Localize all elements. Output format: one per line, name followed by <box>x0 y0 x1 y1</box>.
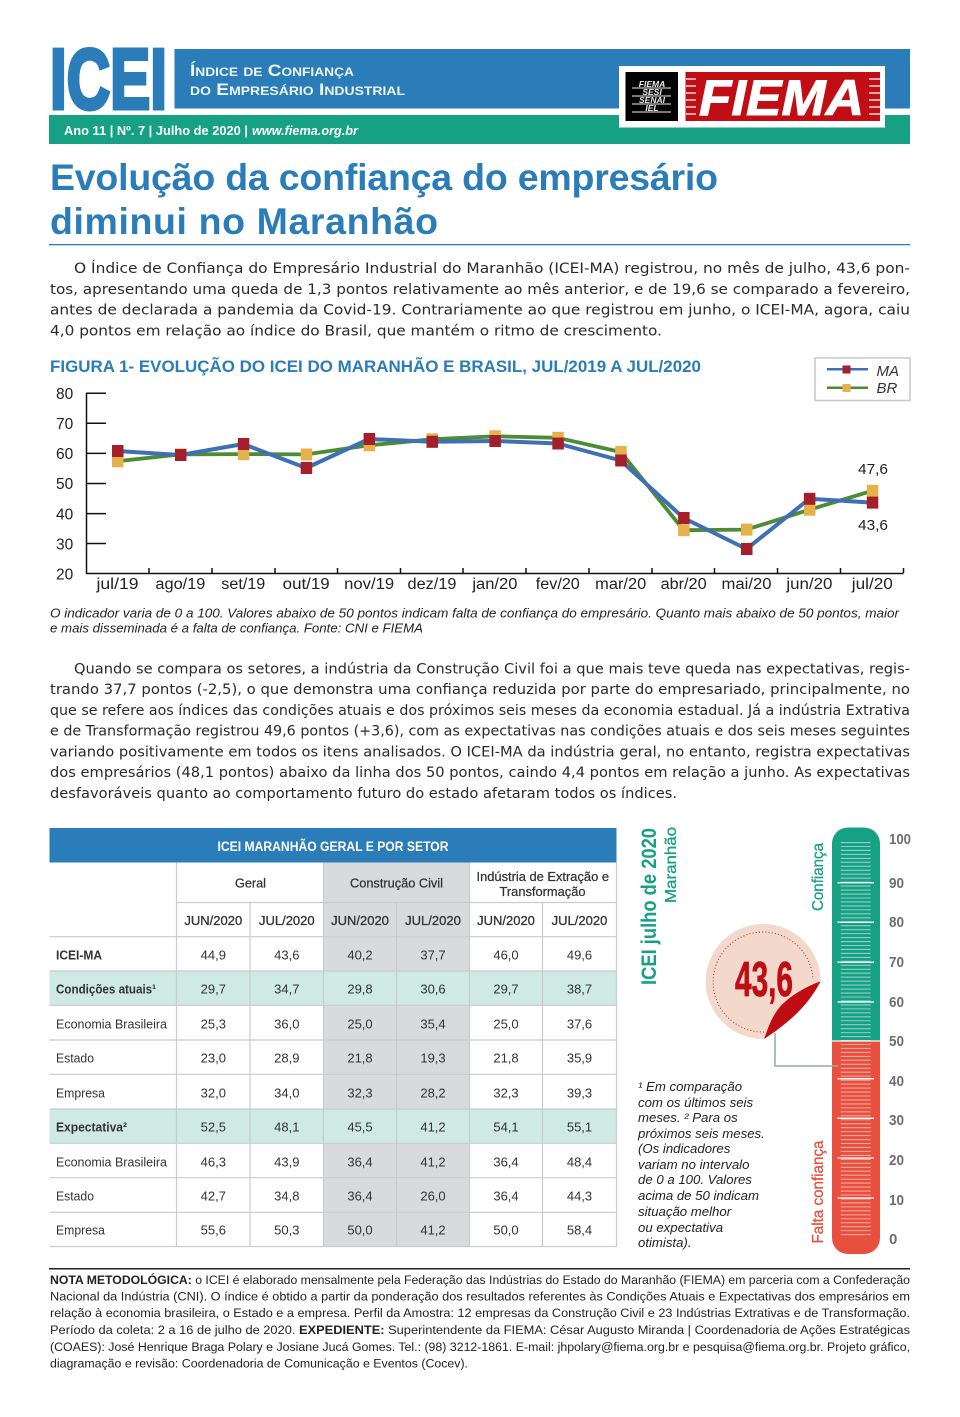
table values: 41,2 <box>420 1120 446 1134</box>
table values: 42,7 <box>201 1188 226 1204</box>
table values: 21,8 <box>493 1050 519 1066</box>
table values: 50,0 <box>347 1222 373 1238</box>
FIEMA logo <box>619 66 885 128</box>
table values: 34,0 <box>274 1086 299 1100</box>
main title: diminui no Maranhão <box>50 200 438 242</box>
table values: 35,4 <box>420 1016 446 1032</box>
footnote: variam no intervalo <box>638 1157 749 1172</box>
table values: 28,9 <box>274 1050 299 1066</box>
table values <box>201 948 592 1238</box>
line chart <box>56 386 904 593</box>
footnote: acima de 50 indicam <box>638 1188 759 1203</box>
row labels: Condições atuais¹ <box>56 982 156 996</box>
table values: 55,1 <box>567 1120 592 1134</box>
x axis labels: mai/20 <box>722 576 772 593</box>
month headers: JUN/2020 <box>477 913 535 928</box>
table values: 46,3 <box>201 1154 226 1170</box>
publication name <box>190 61 405 99</box>
row labels: Estado <box>56 1188 94 1204</box>
second paragraph: que se refere aos índices das condições atuais e dos próximos seis meses da economia estadual. Já a indústria Extrativa <box>50 702 910 719</box>
FIEMA logo: SENAI <box>639 95 666 105</box>
footnote: de 0 a 100. Valores <box>638 1172 752 1187</box>
table values: 46,0 <box>493 948 519 962</box>
month headers: JUN/2020 <box>331 913 389 928</box>
sticker disc <box>706 924 821 1039</box>
footnote: próximos seis meses. <box>637 1126 765 1141</box>
table header band <box>50 828 616 862</box>
row labels: Expectativa² <box>56 1120 128 1134</box>
footer rule <box>49 1268 910 1270</box>
table values: 29,7 <box>201 982 226 996</box>
y axis labels: 40 <box>56 506 74 524</box>
methodological note: Período da coleta: 2 a 16 de julho de 2020. EXPEDIENTE: Superintendente da FIEMA: César Augusto Miranda | Coordenadoria de Ações Estratégicas <box>50 1323 910 1337</box>
table values: 43,9 <box>274 1154 299 1170</box>
table values: 43,6 <box>274 948 299 962</box>
table values: 19,3 <box>420 1050 446 1066</box>
table values: 36,0 <box>274 1016 299 1032</box>
table values: 45,5 <box>347 1120 373 1134</box>
chart note: O indicador varia de 0 a 100. Valores abaixo de 50 pontos indicam falta de confiança do empresário. Quanto mais abaixo de 50 pontos, maior <box>50 606 900 620</box>
scale numbers: 90 <box>889 875 904 892</box>
edition line: Ano 11 | Nº. 7 | Julho de 2020 | <box>64 123 248 138</box>
table values: 36,4 <box>493 1188 519 1204</box>
scale numbers: 30 <box>889 1112 904 1129</box>
dotted ring <box>713 932 813 1032</box>
intro paragraph: 4,0 pontos em relação ao índice do Brasil, que mantém o ritmo de crescimento. <box>50 322 662 340</box>
connector line <box>775 1033 838 1066</box>
chart legend: MA <box>876 363 899 380</box>
x axis labels: mar/20 <box>595 576 647 593</box>
methodological note <box>50 1272 910 1370</box>
footnote: meses. ² Para os <box>638 1110 738 1125</box>
intro paragraph: tos, apresentando uma queda de 1,3 pontos relativamente ao mês anterior, e de 19,6 se comparado a fevereiro, <box>50 281 910 298</box>
y axis labels: 50 <box>56 476 74 493</box>
table values: 30,6 <box>420 982 446 996</box>
end value labels: 43,6 <box>858 517 888 534</box>
table values: 34,8 <box>274 1188 299 1204</box>
second paragraph: e de Transformação registrou 49,6 pontos (+3,6), com as expectativas nas condições atuais e dos seis meses seguintes <box>50 722 910 740</box>
y axis labels: 30 <box>56 536 74 554</box>
chart note: e mais disseminada é a falta de confiança. Fonte: CNI e FIEMA <box>50 620 423 636</box>
row labels: Empresa <box>56 1222 106 1238</box>
table values: 32,3 <box>493 1086 519 1100</box>
row labels: ICEI-MA <box>56 948 103 962</box>
scale numbers: 40 <box>889 1073 904 1090</box>
table fills <box>324 862 470 1246</box>
chart legend: BR <box>876 380 898 397</box>
scale numbers: 80 <box>889 914 904 931</box>
footnote: com os últimos seis <box>638 1095 753 1110</box>
month headers: JUN/2020 <box>184 913 242 928</box>
y axis labels: 70 <box>56 416 74 433</box>
table values: 21,8 <box>347 1050 373 1066</box>
table values: 35,9 <box>567 1050 592 1066</box>
vertical heading: ICEI julho de 2020: ICEI julho de 2020 <box>637 828 661 985</box>
second paragraph: dos empresários (48,1 pontos) abaixo da linha dos 50 pontos, caindo 4,4 pontos em relação a junho. As expectativas <box>50 764 910 781</box>
sticker value: 43,6 <box>735 953 793 1007</box>
y axis labels: 60 <box>56 446 74 463</box>
x axis labels: jan/20 <box>471 576 518 593</box>
table values: 25,0 <box>347 1016 373 1032</box>
table values: 36,4 <box>347 1188 373 1204</box>
sticker curl <box>764 981 821 1039</box>
footnote: ¹ Em comparação <box>638 1079 742 1094</box>
row labels: Estado <box>56 1050 94 1066</box>
BR series line <box>118 436 872 530</box>
month headers <box>184 913 607 928</box>
methodological note: NOTA METODOLÓGICA: o ICEI é elaborado mensalmente pela Federação das Indústrias do Estado do Maranhão (FIEMA) em parceria com a Confederação <box>50 1272 910 1287</box>
scale numbers <box>889 831 911 1248</box>
row labels <box>56 948 168 1238</box>
table values: 32,0 <box>201 1086 226 1100</box>
table values: 25,3 <box>201 1016 226 1032</box>
chart axes <box>86 393 904 574</box>
table values: 58,4 <box>567 1222 592 1238</box>
table values: 25,0 <box>493 1016 519 1032</box>
table values: 49,6 <box>567 948 592 962</box>
intro paragraph <box>50 259 910 340</box>
x axis labels: dez/19 <box>408 576 456 593</box>
footnote: ou expectativa <box>638 1220 723 1235</box>
FIEMA logo: FIEMA <box>699 70 864 126</box>
green edition band <box>49 115 910 144</box>
table values: 54,1 <box>493 1120 519 1134</box>
FIEMA logo: FIEMA <box>639 79 665 89</box>
column group headers: Transformação <box>500 884 586 899</box>
scale numbers: 100 <box>889 831 911 848</box>
x axis labels: out/19 <box>283 576 330 593</box>
zone label: Confiança: Confiança <box>810 843 827 911</box>
zone label: Falta confiança: Falta confiança <box>810 1140 827 1244</box>
y axis labels <box>56 386 74 584</box>
main title <box>50 156 718 242</box>
table values: 39,3 <box>567 1086 592 1100</box>
x axis labels <box>95 576 893 593</box>
end value labels <box>858 461 888 534</box>
column group headers: Geral <box>235 876 266 890</box>
thermometer gauge <box>832 828 911 1254</box>
table values: 41,2 <box>420 1154 446 1170</box>
main title: Evolução da confiança do empresário <box>50 156 718 198</box>
edition line <box>64 123 359 138</box>
table values: 41,2 <box>420 1222 446 1238</box>
intro paragraph: O Índice de Confiança do Empresário Industrial do Maranhão (ICEI-MA) registrou, no mês de julho, 43,6 pon- <box>74 259 910 277</box>
FIEMA logo: SESI <box>642 87 662 97</box>
column group headers: Indústria de Extração e <box>476 869 609 884</box>
table values: 52,5 <box>201 1120 226 1134</box>
scale numbers: 50 <box>889 1033 904 1050</box>
table values: 55,6 <box>201 1222 226 1238</box>
row labels: Economia Brasileira <box>56 1154 168 1170</box>
BR series markers <box>112 430 878 536</box>
second paragraph: Quando se compara os setores, a indústria da Construção Civil foi a que mais teve queda nas expectativas, regis- <box>74 660 910 678</box>
table values: 44,9 <box>201 948 226 962</box>
table values: 48,4 <box>567 1154 592 1170</box>
scale numbers: 70 <box>889 954 904 971</box>
footnote <box>637 1079 765 1250</box>
chart legend <box>815 358 910 400</box>
y axis labels: 80 <box>56 386 74 403</box>
end value labels: 47,6 <box>858 461 888 478</box>
column group headers <box>235 869 609 899</box>
row labels: Economia Brasileira <box>56 1016 168 1032</box>
x axis labels: set/19 <box>221 576 265 593</box>
x axis labels: nov/19 <box>344 576 394 593</box>
table values: 50,0 <box>493 1222 519 1238</box>
column group headers: Construção Civil <box>350 876 443 890</box>
edition line: www.fiema.org.br <box>252 123 359 138</box>
figure title: FIGURA 1- EVOLUÇÃO DO ICEI DO MARANHÃO E BRASIL, JUL/2019 A JUL/2020 <box>50 356 701 376</box>
table values: 23,0 <box>201 1050 226 1066</box>
methodological note: relação à economia brasileira, o Estado e a empresa. Perfil da Amostra: 12 empresas da Construção Civil e 23 Indústrias Extrativas e de Transformação. <box>50 1306 910 1320</box>
table values: 50,3 <box>274 1222 299 1238</box>
sector table: ICEI MARANHÃO GERAL E POR SETOR <box>218 839 449 854</box>
month headers: JUL/2020 <box>259 913 315 928</box>
thermometer body <box>832 828 880 1041</box>
table values: 29,8 <box>347 982 373 996</box>
publication name: Índice de Confiança <box>190 61 354 80</box>
x axis labels: fev/20 <box>536 576 580 593</box>
intro paragraph: antes de declarada a pandemia da Covid-19. Contrariamente ao que registrou em junho, o ICEI-MA, agora, caiu <box>50 302 910 318</box>
MA series line <box>118 439 872 549</box>
ICEI wordmark: ICEI <box>50 32 167 128</box>
methodological note: Nacional da Indústria (CNI). O índice é obtido a partir da ponderação dos resultados referentes às Condições Atuais e Expectativas dos empresários em <box>50 1290 910 1304</box>
scale numbers: 20 <box>889 1152 904 1169</box>
footnote: otimista). <box>638 1235 692 1250</box>
table values: 28,2 <box>420 1086 446 1100</box>
table values: 32,3 <box>347 1086 373 1100</box>
y axis labels: 20 <box>56 566 74 584</box>
table values: 36,4 <box>347 1154 373 1170</box>
footnote: situação melhor <box>638 1204 732 1219</box>
x axis labels: abr/20 <box>661 576 707 593</box>
FIEMA logo: IEL <box>645 103 659 113</box>
value sticker 43,6 <box>706 924 821 1039</box>
month headers: JUL/2020 <box>405 913 461 928</box>
methodological note: (COAES): José Henrique Braga Polary e Josiane Jucá Gomes. Tel.: (98) 3212-1861. E-mail: jhpolary@fiema.org.br e pesquisa@fiema.org.br. Projeto gráfico, <box>50 1340 910 1354</box>
minor ticks <box>841 842 871 1236</box>
footnote: (Os indicadores <box>638 1141 731 1156</box>
table values: 29,7 <box>493 982 519 996</box>
vertical subheading: Maranhão: Maranhão <box>663 827 680 903</box>
table values: 36,4 <box>493 1154 519 1170</box>
blue title band <box>174 49 910 108</box>
month headers: JUL/2020 <box>552 913 607 928</box>
chart note <box>50 606 900 636</box>
scale numbers: 0 <box>889 1231 897 1248</box>
x axis labels: jul/19 <box>95 576 138 593</box>
scale numbers: 60 <box>889 994 904 1011</box>
table values: 40,2 <box>347 948 373 962</box>
publication name: do Empresário Industrial <box>190 81 405 99</box>
MA series markers <box>112 433 878 555</box>
x axis labels: ago/19 <box>155 576 205 593</box>
scale numbers: 10 <box>889 1192 904 1209</box>
table values: 34,7 <box>274 982 299 996</box>
row labels: Empresa <box>56 1086 106 1100</box>
table values: 48,1 <box>274 1120 299 1134</box>
table grid <box>50 862 616 1246</box>
table values: 26,0 <box>420 1188 446 1204</box>
table values: 44,3 <box>567 1188 592 1204</box>
sector table <box>50 828 616 1246</box>
table values: 37,7 <box>420 948 446 962</box>
table values: 37,6 <box>567 1016 592 1032</box>
second paragraph <box>50 660 910 802</box>
header banner <box>49 32 910 144</box>
second paragraph: variando positivamente em todos os itens analisados. O ICEI-MA da indústria geral, no entanto, registra expectativas <box>50 744 910 760</box>
second paragraph: desfavoráveis quanto ao comportamento futuro do estado afetaram todos os índices. <box>50 785 677 802</box>
x axis labels: jun/20 <box>785 576 833 593</box>
x axis labels: jul/20 <box>851 576 893 593</box>
major ticks <box>832 883 880 1198</box>
table values: 38,7 <box>567 982 592 996</box>
second paragraph: trando 37,7 pontos (-2,5), o que demonstra uma confiança reduzida por parte do empresariado, principalmente, no <box>50 681 910 698</box>
methodological note: diagramação e revisão: Coordenadoria de Comunicação e Eventos (Cocev). <box>50 1356 468 1370</box>
